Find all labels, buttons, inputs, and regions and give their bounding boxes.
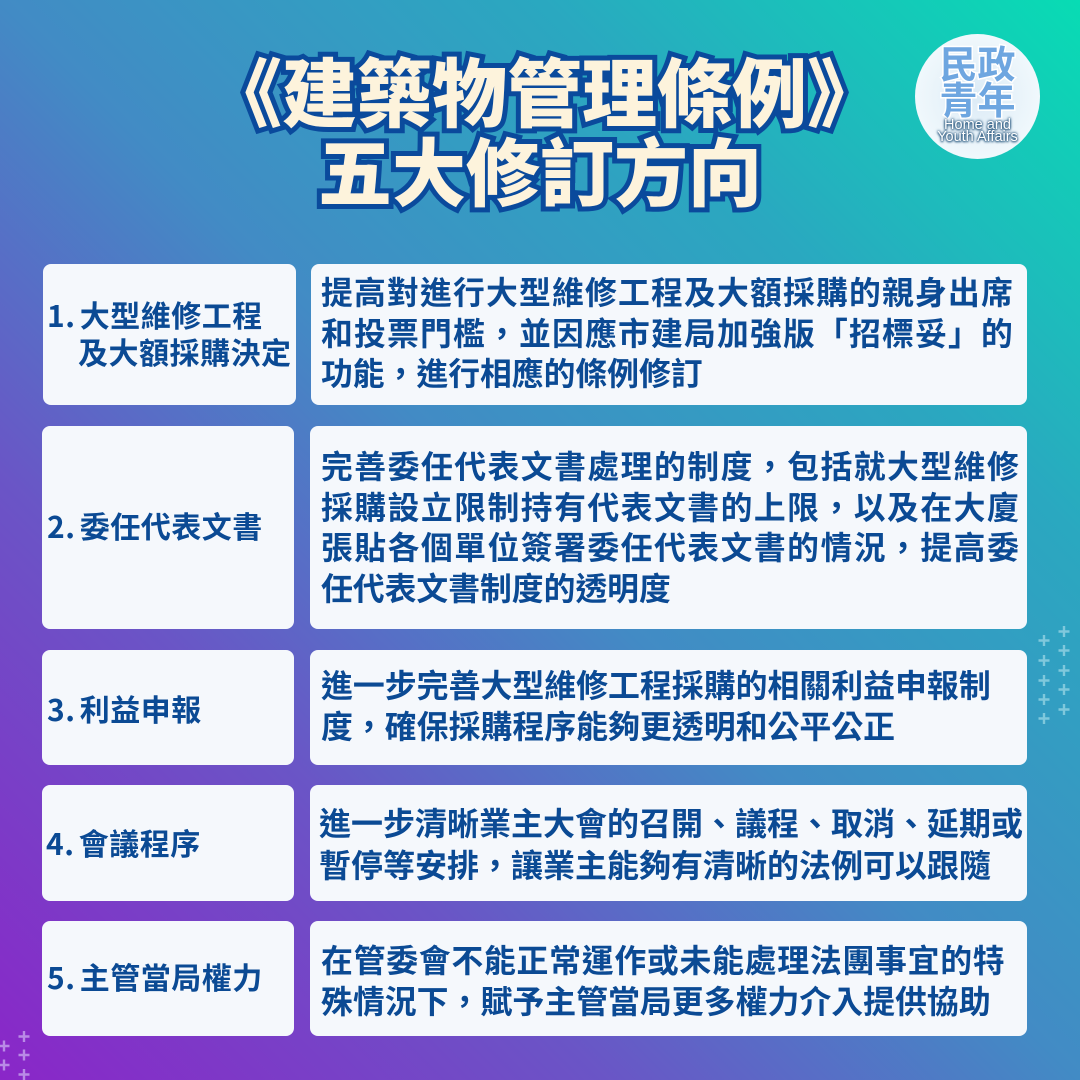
- row 1 text: 和投票門檻，並因應市建局加強版「招標妥」的: [321, 308, 1014, 354]
- row 5 label panel: [42, 921, 294, 1036]
- row 4 label panel: [42, 785, 294, 901]
- row 4 text: 暫停等安排，讓業主能夠有清晰的法例可以跟隨: [319, 841, 991, 887]
- row 4 text panel: [310, 785, 1027, 901]
- row 1 label: 1. 大型維修工程: [47, 292, 263, 336]
- row 5 text: 在管委會不能正常運作或未能處理法團事宜的特: [321, 936, 1005, 982]
- row 2 text: 完善委任代表文書處理的制度，包括就大型維修: [321, 442, 1020, 488]
- row 3 text panel: [310, 650, 1027, 765]
- row 1 text: 提高對進行大型維修工程及大額採購的親身出席: [321, 268, 1014, 314]
- row 3 text: [321, 661, 991, 748]
- row 5 text: [321, 936, 1005, 1023]
- row 1 label: 及大額採購決定: [78, 329, 292, 373]
- row 5 label: 5. 主管當局權力: [47, 954, 263, 998]
- row 2 label: 2. 委任代表文書: [47, 503, 263, 547]
- logo badge: [915, 34, 1040, 159]
- row 2 text: [321, 442, 1020, 610]
- row 2 text panel: [310, 426, 1027, 629]
- row 4 text: 進一步清晰業主大會的召開、議程、取消、延期或: [319, 799, 1023, 845]
- title: 五大修訂方向: [318, 115, 762, 222]
- row 3 text: 度，確保採購程序能夠更透明和公平公正: [321, 702, 895, 748]
- row 3 text: 進一步完善大型維修工程採購的相關利益申報制: [321, 661, 991, 707]
- row 1 text: [321, 268, 1014, 395]
- row 4 label: 4. 會議程序: [46, 820, 201, 864]
- plus pattern right: [1038, 626, 1070, 724]
- row 4 text: [319, 799, 1023, 887]
- row 1 label: [47, 292, 292, 373]
- title: 《建築物管理條例》: [207, 34, 882, 143]
- logo badge: 青年: [939, 70, 1016, 125]
- row 1 label panel: [43, 264, 296, 405]
- plus pattern bottom left: [0, 1031, 30, 1080]
- logo badge: 民政: [939, 34, 1016, 89]
- row 5 text panel: [310, 921, 1027, 1036]
- row 3 label: 3. 利益申報: [47, 686, 202, 730]
- row 2 label panel: [42, 426, 294, 629]
- row 5 text: 殊情況下，賦予主管當局更多權力介入提供協助: [321, 977, 991, 1023]
- row 2 text: 張貼各個單位簽署委任代表文書的情況，提高委: [321, 523, 1020, 569]
- title: [207, 34, 882, 222]
- row 1 text: 功能，進行相應的條例修訂: [321, 349, 703, 395]
- logo badge: Home and: [944, 117, 1011, 133]
- row 1 text panel: [311, 264, 1027, 405]
- row 2 text: 任代表文書制度的透明度: [321, 564, 671, 610]
- row 2 text: 採購設立限制持有代表文書的上限，以及在大廈: [321, 483, 1020, 529]
- logo badge: Youth Affairs: [937, 129, 1018, 145]
- row 3 label panel: [42, 650, 294, 765]
